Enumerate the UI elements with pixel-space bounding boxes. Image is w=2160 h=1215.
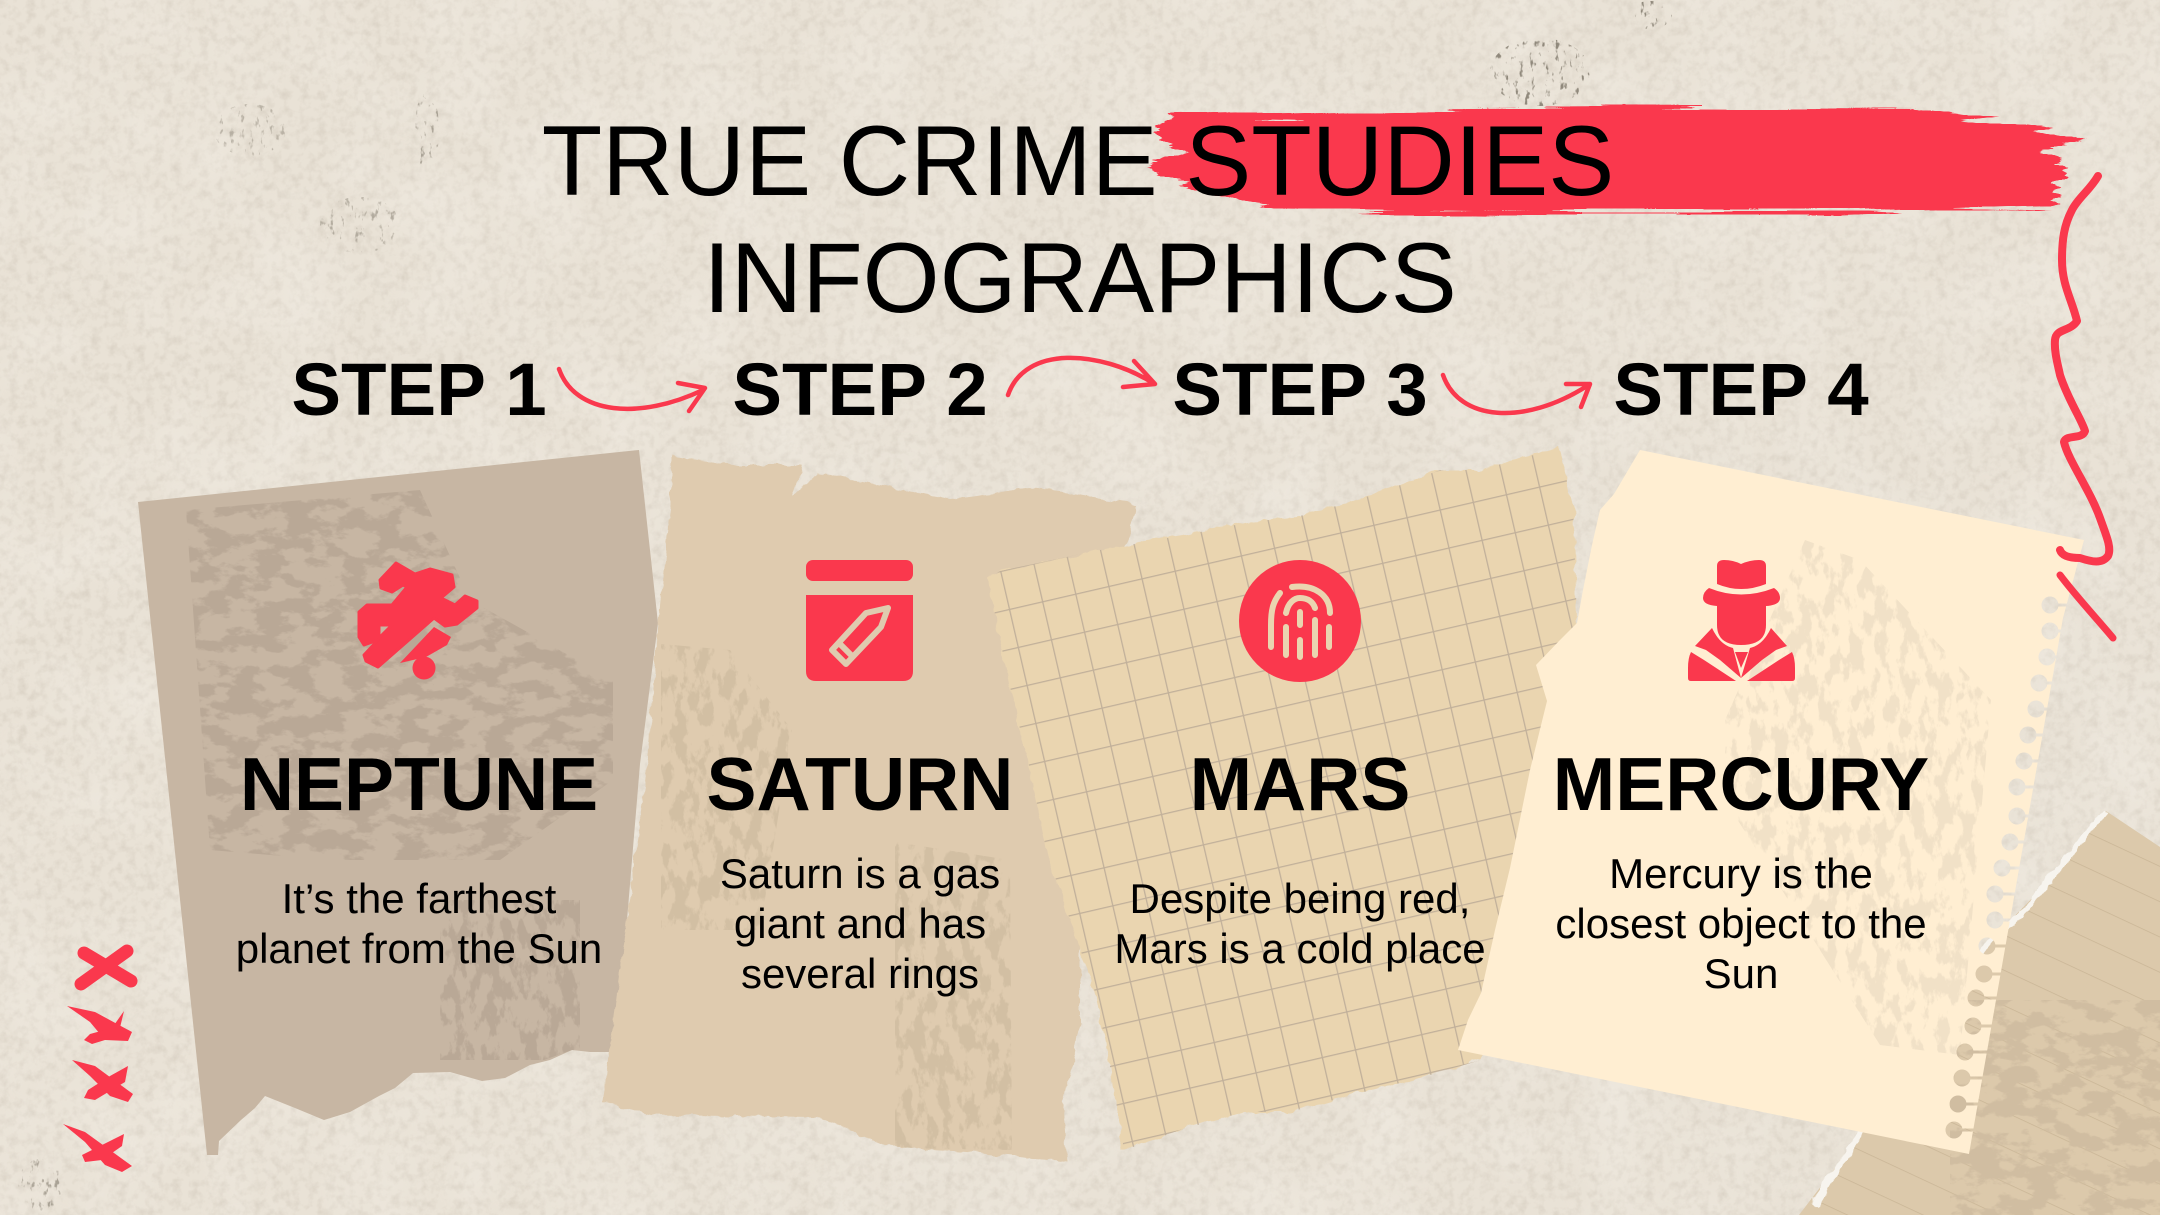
arrow: step 1 to 2	[559, 369, 705, 411]
card 3 text	[1114, 742, 1486, 972]
step labels row	[291, 348, 1869, 431]
card 1 text: NEPTUNE	[240, 742, 598, 826]
card 2 text: SATURN	[707, 742, 1013, 826]
icon: bullet evidence jar	[806, 560, 913, 681]
card 2 text: several rings	[741, 950, 979, 997]
decoration: red squiggle line	[2055, 176, 2113, 638]
card 2 text	[707, 742, 1013, 997]
icon: running figure	[359, 563, 477, 680]
step labels row: STEP 1	[291, 348, 547, 431]
arrow: step 3 to 4	[1443, 375, 1590, 413]
step labels row: STEP 4	[1613, 348, 1869, 431]
icon: fingerprint	[1239, 560, 1361, 682]
card 4 text: closest object to the	[1555, 900, 1927, 947]
card 2 text: Saturn is a gas	[720, 850, 1000, 897]
arrow: step 2 to 3	[1008, 358, 1155, 395]
card 1 text	[236, 742, 602, 972]
torn paper scrap: bottom right	[1799, 811, 2160, 1215]
title: TRUE CRIME STUDIES	[542, 105, 1614, 216]
title	[542, 105, 1614, 333]
icon: detective	[1688, 560, 1795, 681]
card 1 text: planet from the Sun	[236, 925, 602, 972]
panel: card 4 Mercury notebook page	[1458, 450, 2084, 1154]
card 3 text: Mars is a cold place	[1114, 925, 1486, 972]
card 3 text: Despite being red,	[1130, 875, 1470, 922]
card 3 text: MARS	[1190, 742, 1410, 826]
step labels row: STEP 2	[732, 348, 988, 431]
title: INFOGRAPHICS	[703, 222, 1457, 333]
panel: card 1 Neptune	[138, 450, 658, 1155]
panel: card 3 Mars grid paper	[980, 440, 1620, 1160]
decoration: red x marks	[63, 951, 133, 1172]
card 2 text: giant and has	[734, 900, 986, 947]
card 4 text: Sun	[1704, 950, 1778, 997]
card 1 text: It’s the farthest	[282, 875, 557, 922]
decoration: red brush stroke behind title	[1147, 108, 2087, 214]
card 4 text	[1553, 742, 1929, 997]
card 4 text: Mercury is the	[1609, 850, 1873, 897]
step labels row: STEP 3	[1172, 348, 1428, 431]
card 4 text: MERCURY	[1553, 742, 1929, 826]
panel: card 2 Saturn	[603, 455, 1137, 1161]
